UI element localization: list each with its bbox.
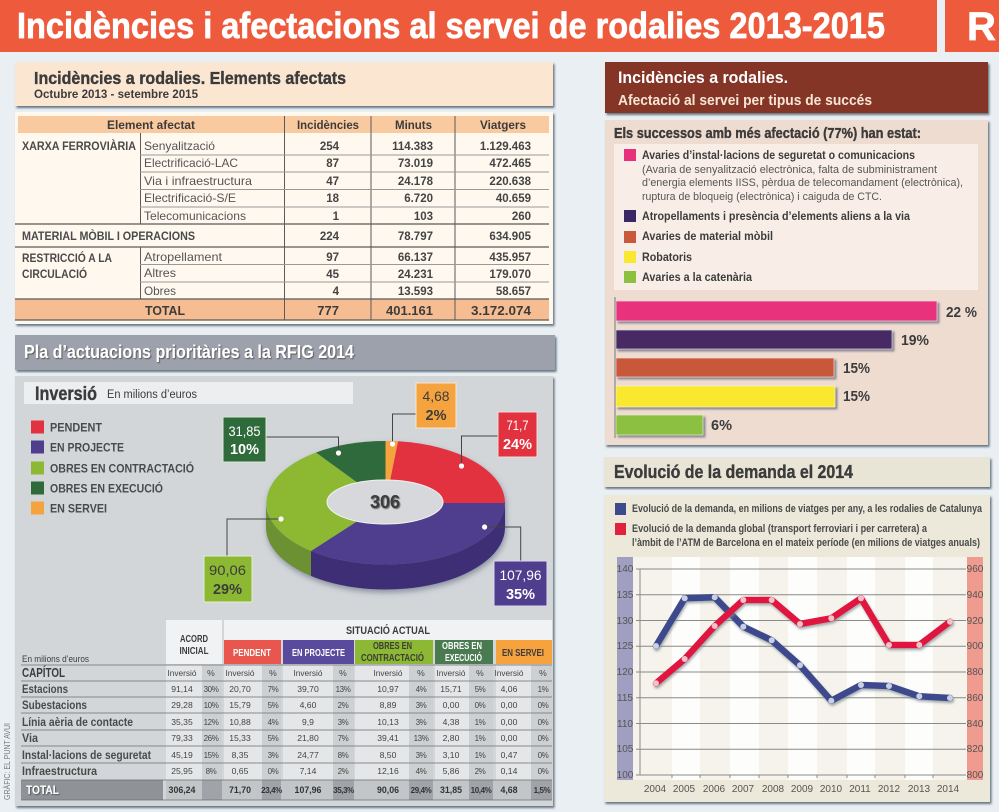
row: infraestructura: 4% — [416, 767, 427, 776]
callout: en projecte: 107,96 — [500, 567, 542, 583]
row: infraestructura: 12,16 — [377, 766, 399, 776]
row: total: 1,5% — [534, 786, 551, 795]
row: via: 15,33 — [229, 733, 251, 743]
row: via: Via — [22, 731, 38, 745]
callout: en projecte: 35% — [506, 587, 535, 603]
row: infraestructura: 8% — [206, 767, 217, 776]
callout: obres en contractació: 90,06 — [209, 562, 246, 578]
table: elements afectats: 1.129.463 — [480, 141, 531, 153]
table: elements afectats: 179.070 — [489, 269, 531, 281]
row: infraestructura: 0% — [268, 767, 279, 776]
row: subestacions: 15,79 — [229, 700, 251, 710]
pie legend: OBRES EN CONTRACTACIÓ — [50, 460, 194, 476]
table: elements afectats: 1 — [333, 211, 340, 223]
row: infraestructura: 0% — [538, 767, 549, 776]
table: elements afectats: 13.593 — [398, 286, 433, 298]
left axis: 110 — [617, 719, 633, 730]
table: elements afectats: 435.957 — [489, 252, 531, 264]
heading: afectació al servei — [605, 62, 988, 113]
table: elements afectats: Viatgers — [480, 118, 526, 132]
row: subestacions: 29,28 — [171, 700, 193, 710]
table: inversió per capítol: % — [339, 668, 347, 678]
left axis: 100 — [617, 770, 634, 781]
row: subestacions: 0,00 — [501, 700, 518, 710]
row: total: 10,4% — [471, 786, 492, 795]
heading: inversió: Inversió — [35, 384, 97, 405]
section tab: R: R — [967, 5, 996, 49]
legend: tipus de succés: ruptura de bloqueig (electrònica) i caiguda de CTC. — [642, 191, 882, 203]
right axis: 840 — [967, 719, 984, 730]
table: inversió per capítol: % — [207, 668, 215, 678]
row: instal·lacions de seguretat: 0% — [538, 751, 549, 760]
callout: obres en contractació — [204, 516, 284, 602]
table: elements afectats: Obres — [144, 284, 176, 298]
right axis: 800 — [967, 770, 984, 781]
table: inversió per capítol: % — [269, 668, 277, 678]
table: elements afectats: 260 — [512, 211, 531, 223]
row: total — [26, 785, 551, 797]
row: estacions: 15,71 — [440, 684, 462, 694]
row: instal·lacions de seguretat: 8% — [338, 751, 349, 760]
table: elements afectats: 224 — [320, 231, 340, 243]
row: total: 23,4% — [261, 786, 282, 795]
row: total: 71,70 — [229, 785, 251, 795]
heading: inversió — [24, 382, 353, 405]
row: total: 29,4% — [411, 786, 432, 795]
heading: inversió: En milions d’euros — [107, 389, 197, 401]
table: elements afectats: 777 — [317, 303, 339, 318]
table: elements afectats: Electrificació-LAC — [144, 156, 238, 170]
table: elements afectats: Altres — [144, 266, 176, 280]
table: elements afectats: 254 — [320, 141, 340, 153]
callout: pendent — [459, 412, 537, 469]
table: elements afectats: MATERIAL MÒBIL I OPERACIONS — [22, 228, 195, 243]
row: estacions: 1% — [538, 685, 549, 694]
row: línia aèria de contacte: 3% — [338, 718, 349, 727]
panel: tipus de succés — [605, 120, 988, 445]
row: línia aèria de contacte — [22, 715, 549, 729]
table: elements afectats: 401.161 — [386, 303, 433, 318]
table header: EN SERVEI — [502, 647, 544, 659]
right axis — [967, 564, 984, 781]
table: elements afectats: 4 — [333, 286, 340, 298]
right axis: 960 — [967, 564, 984, 575]
row: estacions: 7% — [268, 685, 279, 694]
pie legend: PENDENT — [50, 420, 103, 434]
table: elements afectats: Incidències — [297, 118, 359, 132]
row: total: 107,96 — [295, 785, 322, 795]
heading: afectació al servei: Incidències a rodalies. — [618, 68, 788, 87]
table: elements afectats: 114.383 — [392, 141, 433, 153]
right axis: 880 — [967, 667, 984, 678]
row: estacions: Estacions — [22, 682, 68, 696]
row: subestacions: 5% — [268, 701, 279, 710]
right axis: 820 — [967, 744, 984, 755]
heading: evolució de la demanda — [604, 457, 990, 487]
table: elements afectats: 18 — [326, 193, 340, 205]
row: subestacions — [22, 698, 549, 712]
table: elements afectats: 78.797 — [398, 231, 433, 243]
left axis: 125 — [617, 641, 634, 652]
row: línia aèria de contacte: 35,35 — [171, 717, 193, 727]
row: instal·lacions de seguretat: 15% — [204, 751, 219, 760]
row: línia aèria de contacte: 3% — [416, 718, 427, 727]
table header: CONTRACTACIÓ — [361, 651, 424, 664]
row: instal·lacions de seguretat: 3% — [416, 751, 427, 760]
row: instal·lacions de seguretat: 8,35 — [232, 750, 249, 760]
table: elements afectats: Telecomunicacions — [144, 209, 246, 223]
table: elements afectats: RESTRICCIÓ A LA — [22, 250, 112, 265]
row: instal·lacions de seguretat: 3% — [268, 751, 279, 760]
row: infraestructura: 0,14 — [501, 766, 518, 776]
row: subestacions: 0% — [538, 701, 549, 710]
row: estacions: 13% — [336, 685, 351, 694]
row: total: 90,06 — [377, 785, 399, 795]
x axis years: 2006 — [703, 784, 726, 795]
heading: afectació al servei: Afectació al servei per tipus de succés — [618, 92, 872, 109]
row: infraestructura: 2% — [338, 767, 349, 776]
right axis: 860 — [967, 693, 984, 704]
table header: OBRES EN — [442, 640, 482, 652]
x axis years: 2011 — [849, 784, 871, 795]
heading: elements afectats: Octubre 2013 - setembre 2015 — [34, 87, 198, 101]
row: infraestructura: Infraestructura — [22, 764, 97, 778]
line: ATM de Barcelona — [653, 595, 953, 686]
table header: ACORD — [180, 634, 208, 645]
bar chart: 19% — [901, 332, 929, 349]
row: estacions: 39,70 — [297, 684, 319, 694]
table: elements afectats: 97 — [326, 252, 339, 264]
row: estacions — [22, 682, 549, 696]
title banner: Incidències i afectacions al servei de rodalies 2013-2015 — [17, 5, 885, 46]
x axis years: 2005 — [673, 784, 696, 795]
heading: elements afectats — [15, 62, 553, 106]
table header — [22, 620, 552, 664]
callout: en servei: 4,68 — [422, 388, 450, 404]
callout: pendent: 24% — [503, 437, 532, 453]
table: inversió per capítol: % — [417, 668, 425, 678]
row: instal·lacions de seguretat: 24,77 — [297, 750, 319, 760]
table: inversió per capítol: Inversió — [494, 668, 524, 678]
bar chart: 15% — [843, 388, 870, 405]
row: total: TOTAL — [26, 785, 59, 797]
row: infraestructura: 25,95 — [171, 766, 193, 776]
row: infraestructura: 7,14 — [300, 766, 317, 776]
x axis years: 2009 — [791, 784, 814, 795]
left axis: 105 — [617, 744, 634, 755]
heading: pla d'actuacions: Pla d’actuacions prioritàries a la RFIG 2014 — [24, 342, 354, 362]
row: via: 1% — [475, 734, 486, 743]
table: inversió per capítol: % — [476, 668, 484, 678]
row: via: 0,00 — [501, 733, 518, 743]
pie legend: EN PROJECTE — [50, 440, 124, 454]
row: infraestructura: 2% — [475, 767, 486, 776]
table: inversió per capítol: Inversió — [226, 668, 255, 678]
x axis years — [644, 784, 960, 795]
legend: tipus de succés: Avaries a la catenària — [642, 272, 753, 284]
table header: PENDENT — [233, 647, 271, 659]
table: elements afectats: 40.659 — [496, 193, 531, 205]
table: elements afectats: 73.019 — [398, 158, 433, 170]
row: línia aèria de contacte: 10,13 — [377, 717, 399, 727]
table header: OBRES EN — [373, 640, 412, 652]
table header: EN PROJECTE — [292, 647, 345, 659]
row: via: 79,33 — [171, 733, 193, 743]
x axis years: 2010 — [820, 784, 843, 795]
x axis years: 2012 — [878, 784, 901, 795]
row: subestacions: 8,89 — [380, 700, 397, 710]
table header: EXECUCIÓ — [445, 651, 482, 664]
table header: En milions d’euros — [22, 654, 89, 664]
x axis years: 2008 — [762, 784, 785, 795]
bar chart: 6% — [711, 417, 732, 434]
row: subestacions: 2% — [338, 701, 349, 710]
row: línia aèria de contacte: 0% — [538, 718, 549, 727]
table: elements afectats: Minuts — [395, 118, 432, 132]
callout: obres en execució: 31,85 — [228, 423, 261, 439]
row: via — [22, 731, 549, 745]
table: elements afectats: Via i infraestructura — [144, 174, 252, 188]
row: instal·lacions de seguretat: 3,10 — [443, 750, 460, 760]
table header: SITUACIÓ ACTUAL — [346, 624, 430, 637]
row: total: 35,3% — [333, 786, 354, 795]
row: total: 31,85 — [440, 785, 462, 795]
callout: obres en execució: 10% — [230, 442, 259, 458]
row: total: 4,68 — [500, 785, 518, 795]
bar chart: 22 % — [946, 304, 977, 321]
row: estacions: 5% — [475, 685, 486, 694]
left axis: 130 — [617, 616, 634, 627]
row: línia aèria de contacte: 10,88 — [229, 717, 251, 727]
callout: en servei: 2% — [426, 408, 447, 424]
callout: en servei — [390, 383, 456, 447]
table: inversió per capítol: CAPÍTOL — [22, 665, 65, 680]
section tab: R — [945, 0, 999, 52]
row: línia aèria de contacte: 9,9 — [302, 717, 314, 727]
callout: en projecte — [482, 524, 547, 606]
row: estacions: 4,06 — [501, 684, 518, 694]
table: inversió per capítol: Inversió — [374, 668, 403, 678]
x axis years: 2007 — [732, 784, 755, 795]
row: via: 21,80 — [297, 733, 319, 743]
heading: elements afectats: Incidències a rodalies. Elements afectats — [34, 68, 346, 88]
table: elements afectats: 58.657 — [496, 286, 531, 298]
table: elements afectats: 66.137 — [398, 252, 433, 264]
row: via: 0% — [538, 734, 549, 743]
panel heading: Els successos amb més afectació (77%) han estat: — [614, 125, 921, 142]
row: subestacions: 0% — [475, 701, 486, 710]
callout: pendent: 71,7 — [506, 417, 529, 433]
row: instal·lacions de seguretat — [22, 748, 549, 762]
pie legend — [31, 420, 194, 516]
chart legend — [615, 503, 983, 549]
x axis years: 2013 — [908, 784, 931, 795]
table: inversió per capítol: Inversió — [294, 668, 323, 678]
row: infraestructura: 0,65 — [232, 766, 249, 776]
row: total: 306,24 — [169, 785, 196, 795]
legend: tipus de succés: Avaries d’instal·lacions de seguretat o comunicacions — [642, 150, 915, 162]
legend: tipus de succés: (Avaria de senyalització electrònica, falta de subministrament — [642, 164, 937, 176]
row: estacions: 91,14 — [171, 684, 193, 694]
left axis: 140 — [617, 564, 634, 575]
table: elements afectats: 103 — [414, 211, 433, 223]
right axis: 940 — [967, 590, 984, 601]
panel: evolució de la demanda — [604, 495, 990, 802]
x axis years: 2014 — [937, 784, 960, 795]
row: línia aèria de contacte: 0,00 — [501, 717, 518, 727]
row: estacions: 20,70 — [229, 684, 251, 694]
row: via: 2,80 — [443, 733, 460, 743]
right axis: 900 — [967, 641, 984, 652]
row: estacions: 4% — [416, 685, 427, 694]
table: elements afectats: 634.905 — [489, 231, 532, 243]
table: elements afectats: TOTAL — [145, 303, 185, 318]
legend: tipus de succés — [614, 144, 978, 290]
callout: obres en execució — [223, 417, 341, 462]
line: rodalies de Catalunya — [653, 594, 953, 704]
row: estacions: 30% — [204, 685, 219, 694]
row: via: 7% — [338, 734, 349, 743]
table: inversió per capítol: Inversió — [168, 668, 197, 678]
credit: GRÀFIC: EL PUNT AVUI — [3, 723, 12, 800]
row: instal·lacions de seguretat: 1% — [475, 751, 486, 760]
bar chart: 15% — [843, 360, 870, 377]
table: elements afectats: CIRCULACIÓ — [22, 266, 87, 281]
row: línia aèria de contacte: Línia aèria de contacte — [22, 715, 133, 729]
table: inversió per capítol: % — [539, 668, 547, 678]
table: elements afectats: 47 — [326, 176, 339, 188]
table: inversió per capítol: Inversió — [436, 668, 466, 678]
pie legend: OBRES EN EXECUCIÓ — [50, 480, 163, 496]
3D donut chart — [266, 441, 505, 590]
table: elements afectats: 220.638 — [489, 176, 532, 188]
row: via: 5% — [268, 734, 279, 743]
row: línia aèria de contacte: 12% — [204, 718, 219, 727]
row: línia aèria de contacte: 4% — [268, 718, 279, 727]
legend: tipus de succés: Robatoris — [642, 252, 692, 264]
line chart — [617, 557, 984, 795]
row: subestacions: 10% — [204, 701, 219, 710]
heading: evolució de la demanda: Evolució de la demanda el 2014 — [614, 462, 853, 482]
table: elements afectats — [15, 112, 553, 324]
row: estacions: 10,97 — [377, 684, 399, 694]
x axis years: 2004 — [644, 784, 667, 795]
table: elements afectats: 87 — [326, 158, 339, 170]
table: elements afectats: 3.172.074 — [471, 303, 532, 318]
pie legend: EN SERVEI — [50, 502, 107, 516]
left axis — [617, 564, 634, 781]
row: subestacions: Subestacions — [22, 698, 87, 712]
table: elements afectats: Senyalització — [144, 139, 215, 153]
table: elements afectats: 24.231 — [398, 269, 434, 281]
row: subestacions: 3% — [416, 701, 427, 710]
chart legend: Evolució de la demanda global (transport ferroviari i per carretera) a — [632, 523, 928, 535]
row: via: 26% — [204, 734, 219, 743]
row: subestacions: 4,60 — [300, 700, 317, 710]
table header: INICIAL — [180, 646, 208, 657]
legend: tipus de succés: Avaries de material mòbil — [642, 231, 773, 243]
3D donut chart: 306 — [370, 492, 400, 512]
table: inversió per capítol — [21, 620, 552, 800]
table: elements afectats: Element afectat — [107, 118, 195, 132]
table: elements afectats: Electrificació-S/E — [144, 191, 236, 205]
row: línia aèria de contacte: 4,38 — [443, 717, 460, 727]
table: elements afectats: Atropellament — [144, 250, 223, 264]
left axis: 120 — [617, 667, 634, 678]
row: instal·lacions de seguretat: Instal·lacions de seguretat — [22, 748, 151, 762]
row: infraestructura: 5,86 — [443, 766, 460, 776]
bar chart — [615, 297, 977, 438]
right axis: 920 — [967, 616, 984, 627]
table: elements afectats: 24.178 — [398, 176, 434, 188]
legend: tipus de succés: d’energia elements IISS, pèrdua de telecomandament (electrònica), — [642, 177, 963, 189]
row: instal·lacions de seguretat: 8,50 — [380, 750, 397, 760]
row: infraestructura — [22, 764, 549, 778]
row: subestacions: 0,00 — [443, 700, 460, 710]
row: instal·lacions de seguretat: 0,47 — [501, 750, 518, 760]
legend: tipus de succés: Atropellaments i presència d’elements aliens a la via — [642, 211, 911, 223]
row: via: 13% — [414, 734, 429, 743]
row: via: 39,41 — [377, 733, 399, 743]
row: instal·lacions de seguretat: 45,19 — [171, 750, 193, 760]
panel: inversió — [15, 376, 553, 806]
left axis: 135 — [617, 590, 634, 601]
left axis: 115 — [617, 693, 633, 704]
table: elements afectats: 45 — [326, 269, 340, 281]
table: elements afectats: 6.720 — [404, 193, 433, 205]
row: línia aèria de contacte: 1% — [475, 718, 486, 727]
heading: pla d'actuacions — [15, 335, 555, 370]
table: elements afectats: XARXA FERROVIÀRIA — [22, 138, 136, 153]
table: elements afectats: 472.465 — [489, 158, 532, 170]
callout: obres en contractació: 29% — [213, 582, 242, 598]
